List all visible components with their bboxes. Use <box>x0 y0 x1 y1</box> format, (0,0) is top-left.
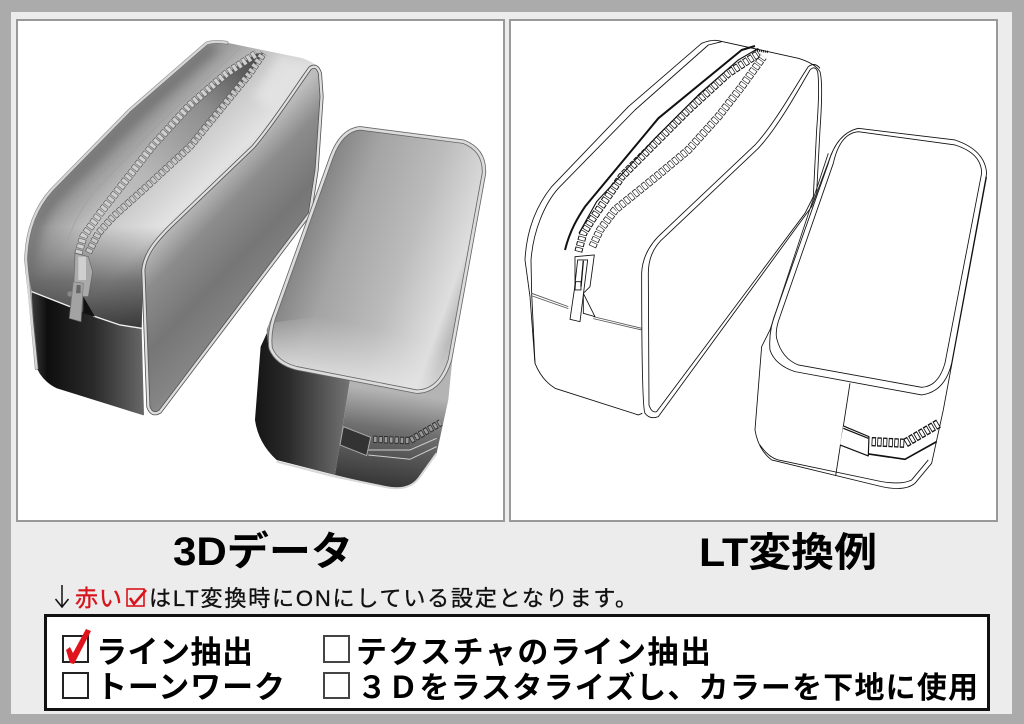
bag A: side panel <box>143 67 322 413</box>
settings box <box>46 616 988 710</box>
bag A: seam line <box>32 292 142 328</box>
option: rasterize 3D <box>324 671 978 705</box>
label: ライン抽出 <box>96 635 253 670</box>
bag A: top and front shading <box>27 43 316 328</box>
note line <box>56 585 637 611</box>
bag B: top panel highlight <box>268 297 462 390</box>
line art bags illustration <box>525 40 987 488</box>
red check mark <box>66 629 91 664</box>
line bag A: zipper pull <box>570 255 595 322</box>
heading: 3D data: 3Dデータ <box>173 529 353 574</box>
3D bags illustration <box>20 30 485 488</box>
bag A: zipper pull <box>67 253 95 322</box>
red checkbox icon <box>127 589 146 606</box>
panel: LT line conversion <box>510 20 997 521</box>
bag A: zipper <box>65 48 263 254</box>
label: テクスチャのライン抽出 <box>356 635 711 670</box>
bag B: left end panel <box>255 330 350 475</box>
heading: LT conversion example: LT変換例 <box>699 531 877 575</box>
arrow <box>56 585 68 607</box>
line bag A: zipper teeth <box>565 46 768 252</box>
bag B: piping rim <box>270 128 484 488</box>
line bag B: lid outline <box>770 128 987 395</box>
label: ３Ｄをラスタライズし、カラーを下地に使用 <box>357 671 978 705</box>
red word: 赤い <box>75 585 122 611</box>
line bag B: body outline <box>755 177 987 488</box>
bag A: piping rims <box>26 42 322 413</box>
panel: 3D data render <box>17 20 504 521</box>
bag B: zipper <box>340 423 441 459</box>
note text: はLT変換時にONにしている設定となります。 <box>149 586 637 611</box>
option: texture line extraction <box>324 635 711 670</box>
option: tone work <box>63 670 285 705</box>
line bag B: zipper and pull <box>840 423 939 459</box>
bag A: lower front panel <box>32 292 144 415</box>
bag B: right end panel <box>335 357 453 488</box>
label: トーンワーク <box>96 670 285 705</box>
line bag A: body outline <box>525 40 822 418</box>
bag B: top panel <box>267 128 485 390</box>
option: line extraction <box>63 629 253 670</box>
